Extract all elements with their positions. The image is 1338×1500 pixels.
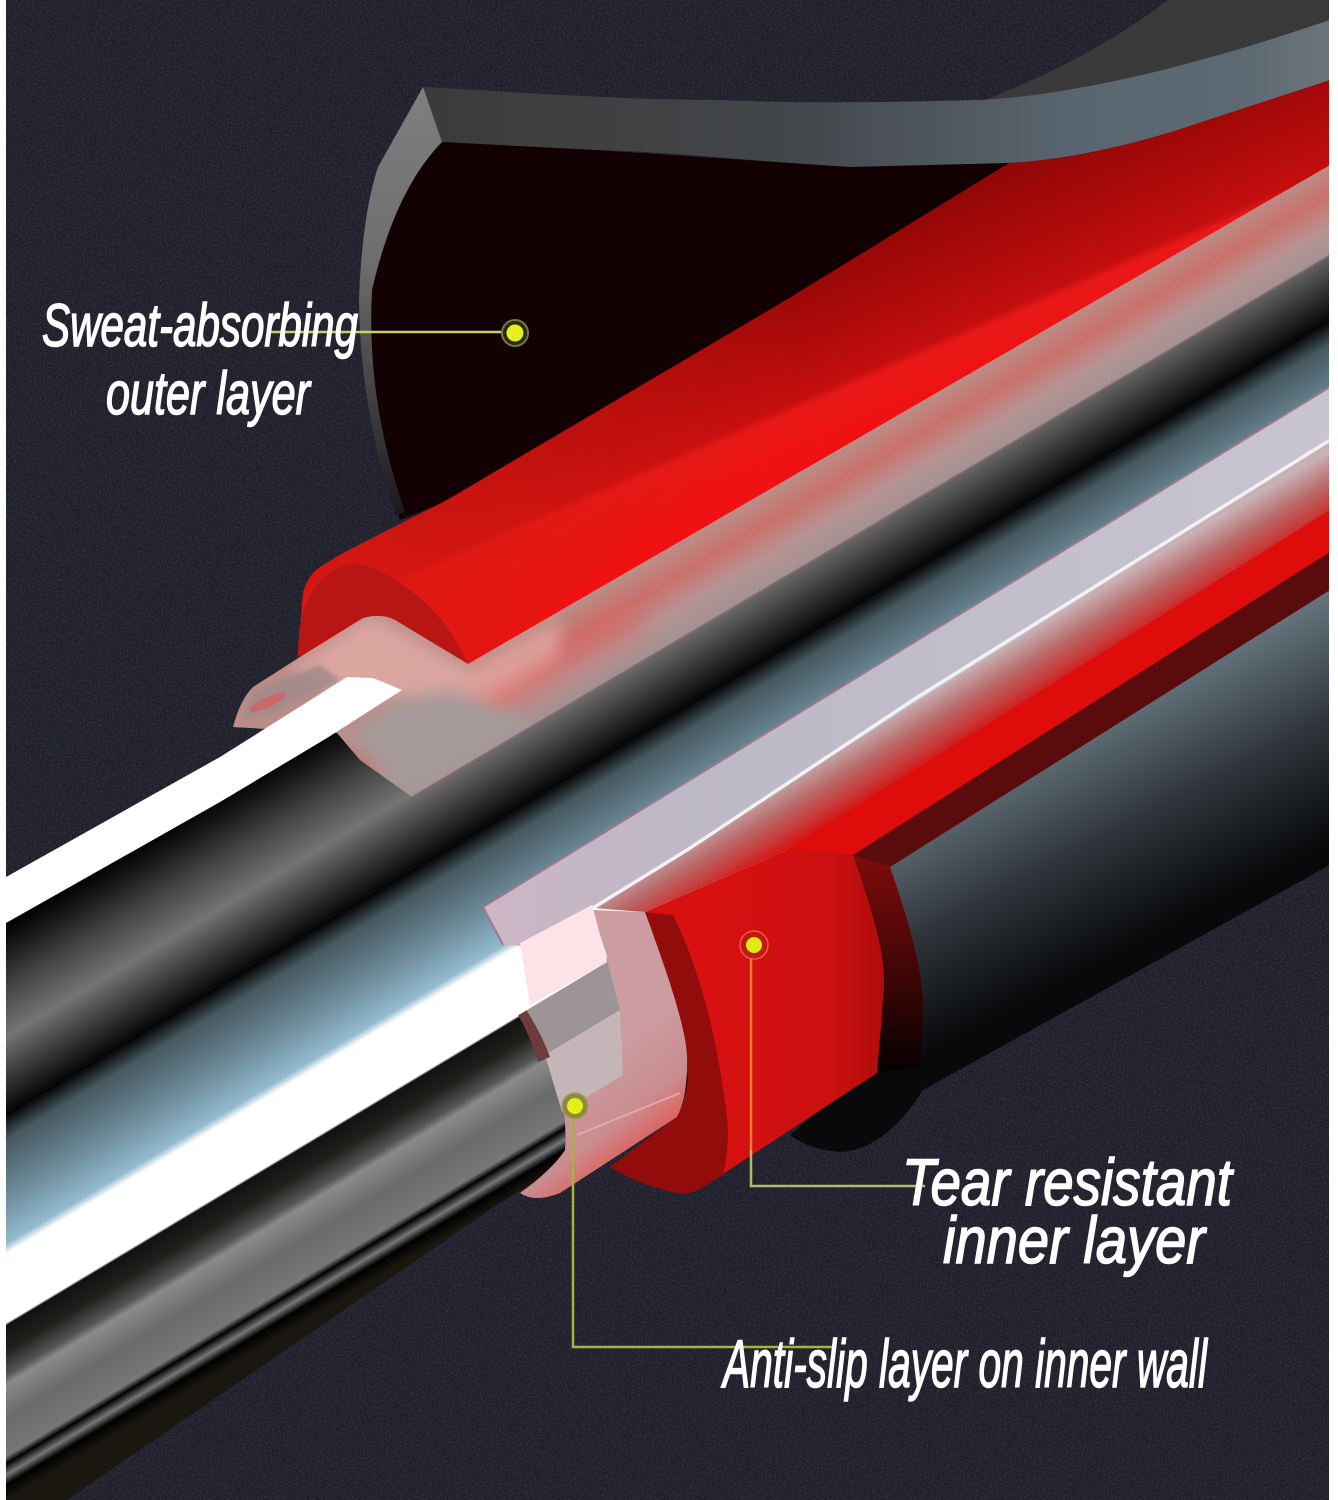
label: sweat-absorbing outer layer: outer layer [106, 360, 311, 427]
label: tear resistant inner layer: inner layer [943, 1203, 1208, 1277]
red inner layer lower [610, 510, 1330, 1193]
red and pink band [592, 440, 1330, 912]
label: sweat-absorbing outer layer: Sweat-absorbing [42, 292, 358, 359]
label: tear resistant inner layer: Tear resistant [902, 1145, 1234, 1219]
callout: anti-slip layer on inner wall [562, 1093, 1208, 1402]
translucent layer upper [233, 165, 1330, 797]
lavender translucent band [483, 387, 1330, 950]
outer sweat-absorbing layer peeled flap [359, 0, 1330, 520]
label: sweat-absorbing outer layer [42, 292, 358, 427]
icon: marker dot anti-slip layer [562, 1093, 588, 1119]
dark outer layer lower [790, 590, 1330, 1152]
red foam layer upper [298, 80, 1330, 680]
white highlight strip lower [6, 905, 607, 1323]
icon: marker dot outer layer [502, 320, 528, 346]
callout: sweat-absorbing outer layer [42, 292, 528, 427]
red foam cut end [298, 563, 468, 664]
callout: tear resistant inner layer [740, 931, 1234, 1277]
label: tear resistant inner layer [902, 1145, 1234, 1277]
white streak highlight [593, 440, 1330, 908]
icon: marker dot inner layer [740, 931, 768, 959]
translucent hood lower [516, 910, 687, 1198]
white highlight strip upper [6, 677, 402, 923]
